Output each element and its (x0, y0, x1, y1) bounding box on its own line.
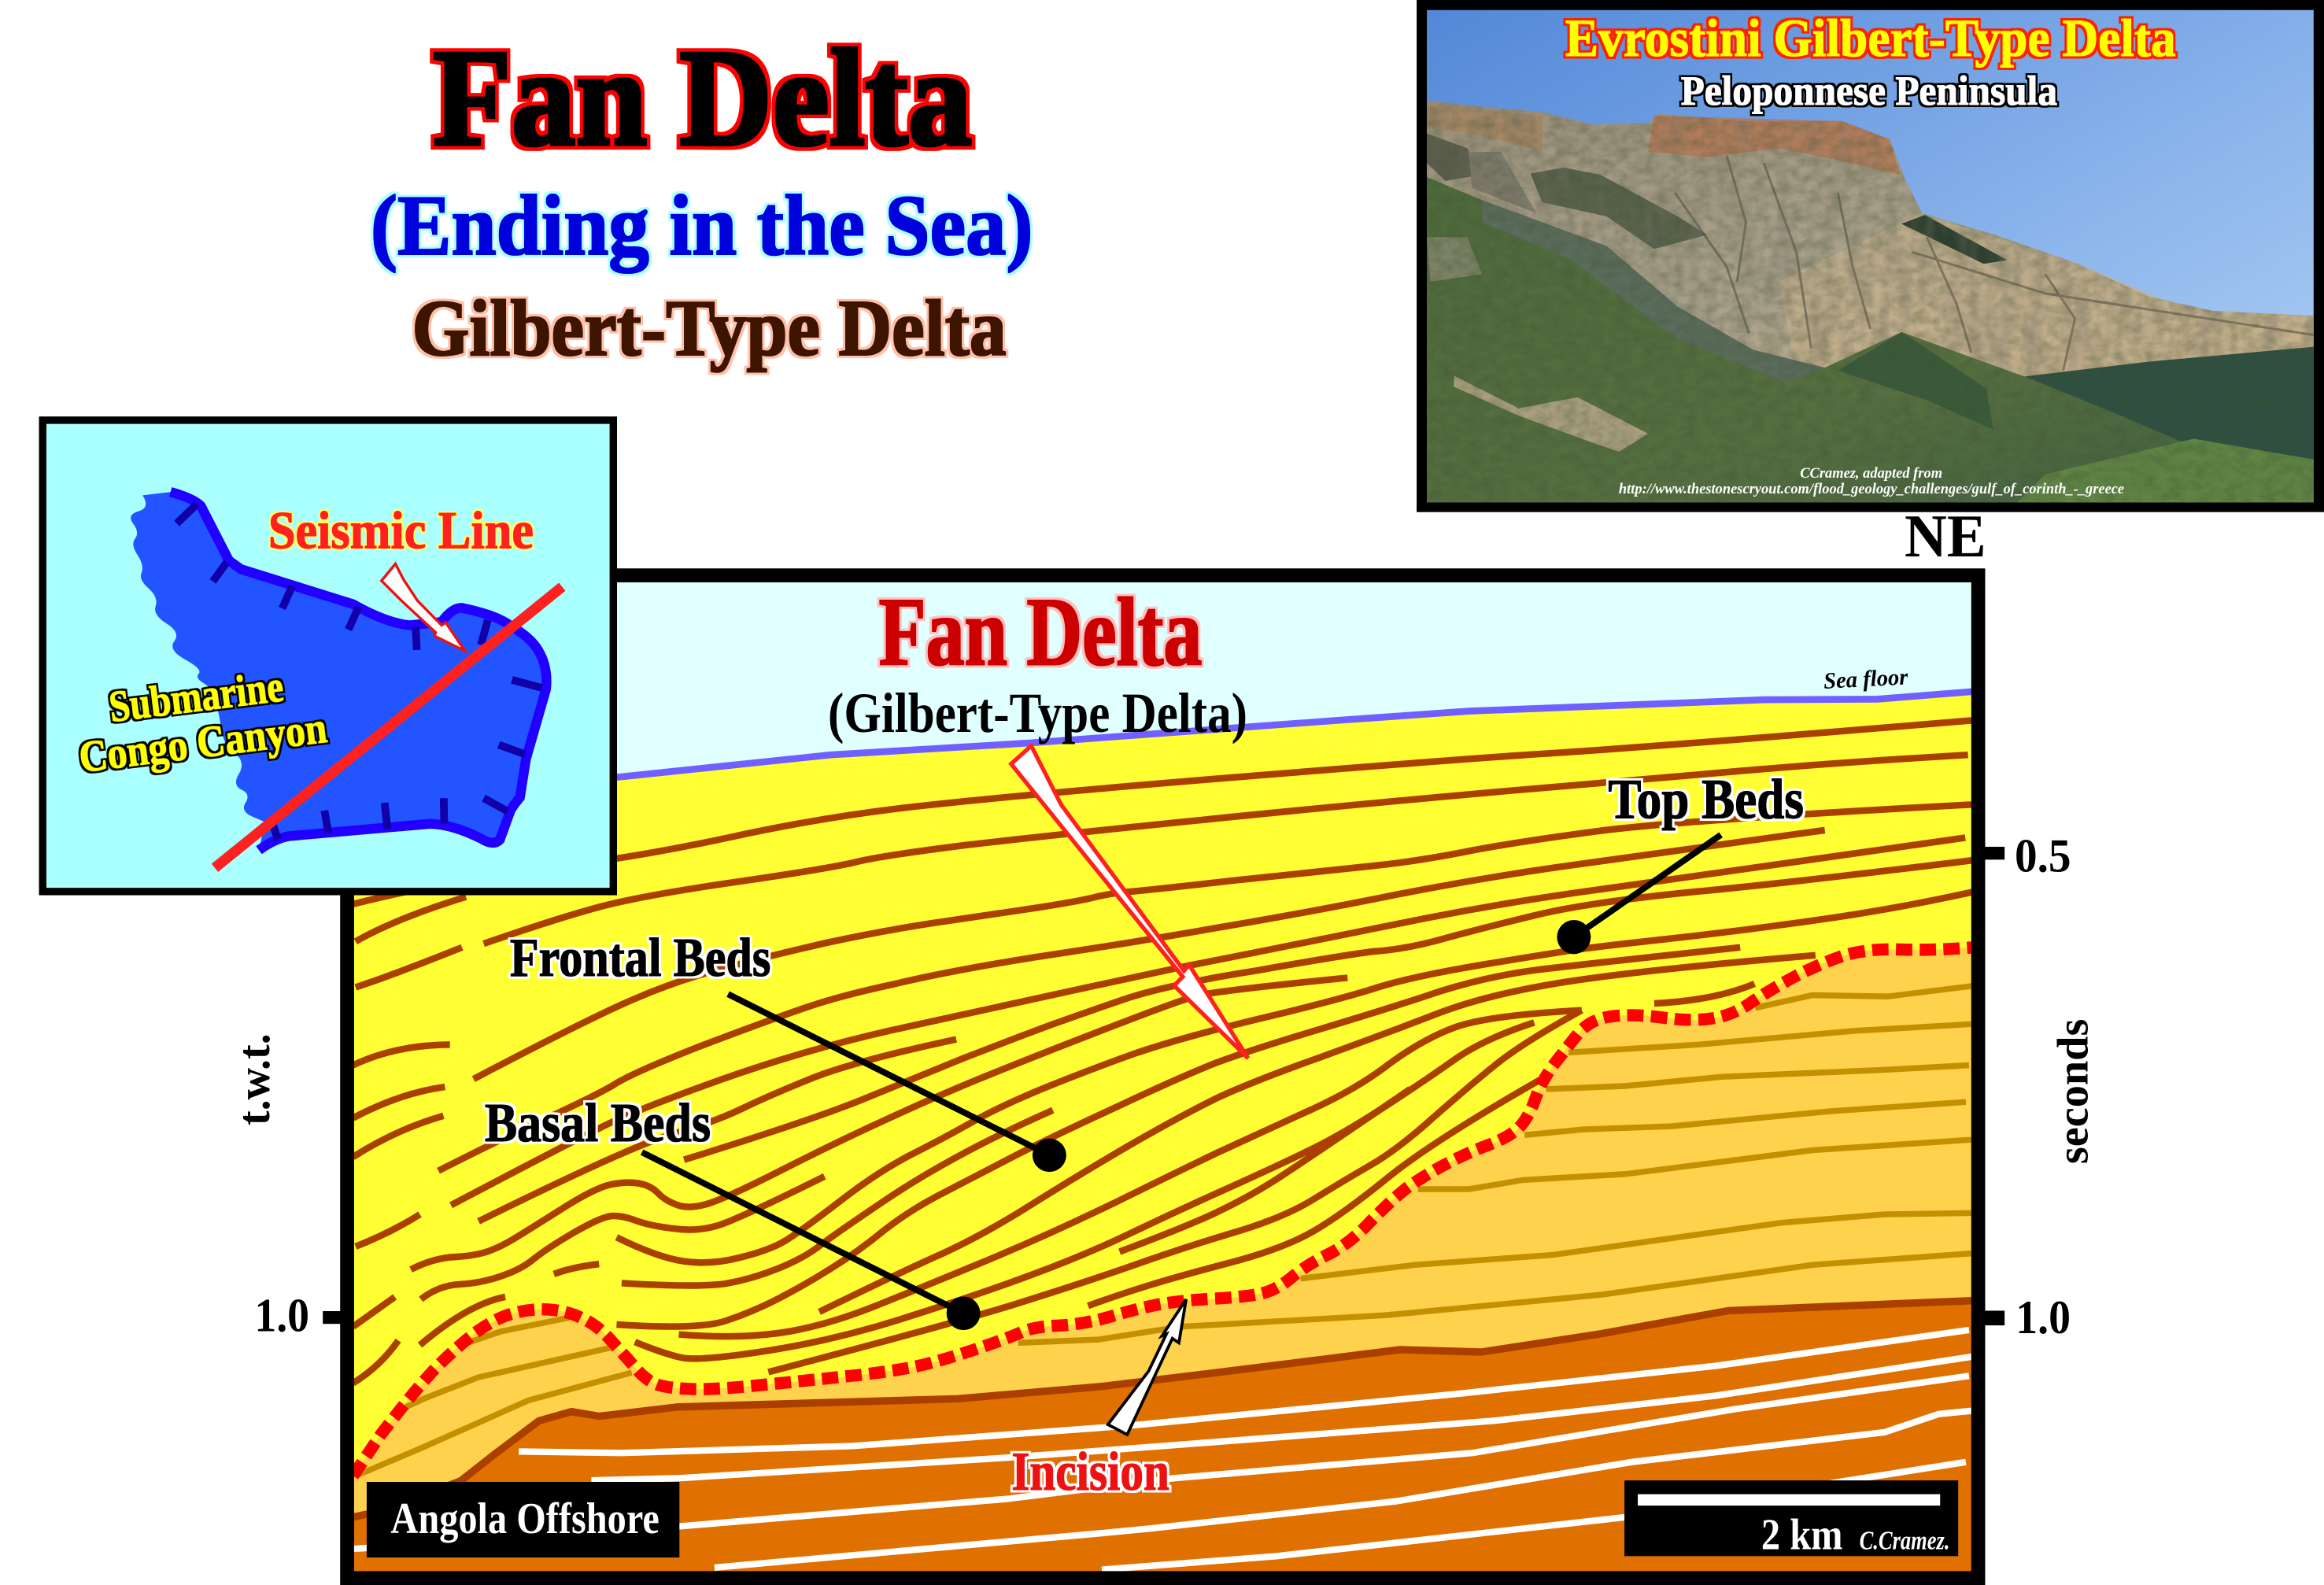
callout: Top Beds: Top Beds (1608, 769, 1804, 831)
axis value: 0.5: 0.5 (2015, 829, 2071, 882)
photo subtitle: Peloponnese Peninsula (1681, 68, 2057, 114)
label: NE: NE (1905, 502, 1986, 570)
dark-yellow pre-incision reflectors (356, 986, 1973, 1476)
photo orange cap rock (1648, 116, 1900, 175)
subtitle: Ending in the Sea: (Ending in the Sea) (371, 178, 1033, 273)
callout: Frontal Beds: Frontal Beds (510, 928, 770, 988)
photo tree patches (1531, 168, 1707, 249)
axis value: 1.0 right: 1.0 (2015, 1291, 2071, 1344)
arrow: seismic line pointer (382, 563, 465, 651)
panel: Evrostini photo (1417, 0, 2324, 512)
arrow: fan delta pointer (1011, 746, 1248, 1059)
incision surface dashed line (353, 948, 1973, 1476)
white substrate reflectors (353, 1330, 1972, 1569)
canyon fill (131, 492, 546, 850)
photo dark forest (2025, 347, 2314, 463)
callout: Basal Beds (485, 1093, 981, 1330)
label: Congo Canyon: Congo Canyon (76, 704, 330, 782)
pre-incision light orange unit (353, 948, 1973, 1572)
sea floor line (353, 692, 1972, 805)
label box: Angola Offshore (367, 1482, 679, 1557)
seismic section subtitle: (Gilbert-Type Delta) (828, 682, 1247, 744)
photo tan lower cliff (1779, 213, 2314, 376)
dark orange substrate (353, 1301, 1973, 1572)
label: Submarine: Submarine (106, 662, 286, 732)
callout: Basal Beds: Basal Beds (485, 1093, 711, 1154)
callout: Top Beds (1557, 769, 1804, 954)
scale bar: 2 km: 2 km (1761, 1511, 1842, 1560)
fan delta yellow body (354, 695, 1971, 1464)
callout: Frontal Beds (510, 928, 1066, 1172)
photo green slope (1426, 176, 2315, 504)
axis value: 1.0 left: 1.0 (254, 1290, 309, 1343)
photo cliff fissures (1675, 156, 2314, 371)
photo source url: http://www.thestonescryout.com/flood_geology_challenges/gulf_of_corinth_-_greece (1619, 481, 2124, 497)
title: Fan Delta: Fan Delta (433, 21, 972, 175)
photo sky (1426, 9, 2315, 504)
left axis (228, 1033, 342, 1343)
photo title: Evrostini Gilbert-Type Delta (1565, 9, 2176, 68)
label: sea floor: Sea floor (1823, 664, 1909, 694)
photo bright foreground (2015, 438, 2314, 504)
photo cliff face (1427, 101, 2314, 376)
section frame (347, 575, 1979, 1578)
photo land texture (1426, 89, 2315, 504)
photo lower left outcrop (1454, 375, 1648, 452)
sea water (617, 582, 1971, 774)
photo rock streaks (1426, 89, 2315, 386)
scale bar: 2 km: C.Cramez. (1860, 1527, 1949, 1556)
axis title: seconds: seconds (2049, 1019, 2098, 1164)
seismic section title: Fan Delta (879, 577, 1202, 685)
fan delta bed reflectors (353, 720, 1973, 1384)
panel: seismic section (347, 575, 1979, 1578)
subtitle: Gilbert-Type Delta: Gilbert-Type Delta (412, 283, 1007, 372)
canyon wall outline (171, 492, 546, 850)
label box: Angola Offshore: Angola Offshore (390, 1494, 660, 1543)
photo shadow along cliff base (1482, 200, 1824, 382)
photo credit: CCramez, adapted from (1800, 465, 1942, 482)
inset map: Congo Canyon (42, 420, 613, 892)
substrate top boundary (353, 1301, 1973, 1517)
axis title: t.w.t.: t.w.t. (228, 1033, 279, 1125)
canyon wall ticks (176, 504, 542, 840)
arrow: incision pointer (1108, 1299, 1186, 1435)
label: Incision: Incision (1011, 1442, 1169, 1502)
right axis (1983, 829, 2098, 1344)
scale bar: 2 km (1624, 1480, 1958, 1560)
seismic line trace (215, 587, 562, 868)
label: Seismic Line: Seismic Line (268, 501, 534, 560)
